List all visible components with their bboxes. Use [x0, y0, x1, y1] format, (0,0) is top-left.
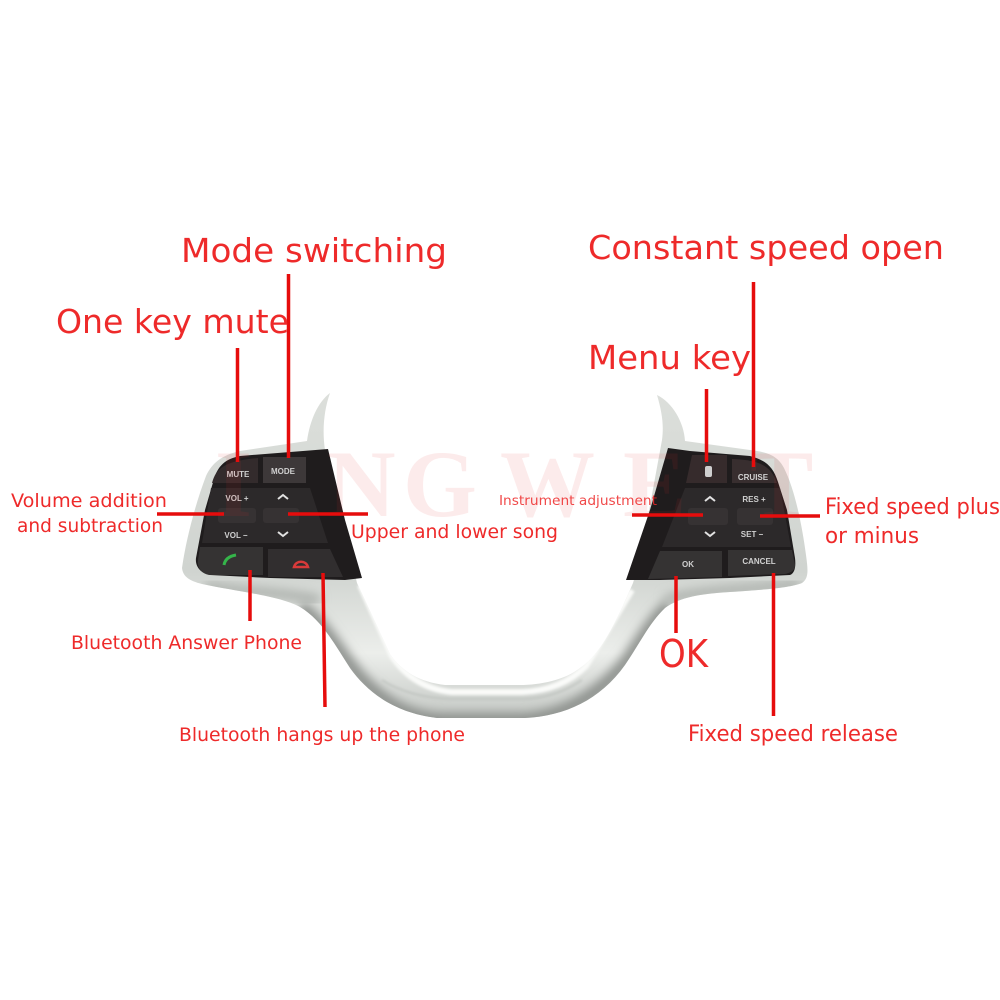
right button panel: RES +	[742, 495, 766, 504]
key: menu	[686, 455, 727, 483]
label: fixed speed release: Fixed speed release	[688, 722, 898, 747]
trim shading	[205, 584, 800, 720]
label: instrument adjustment: Instrument adjustment	[499, 493, 657, 509]
panel underside shadow	[205, 584, 800, 600]
key: mode	[263, 457, 306, 483]
icon: red phone	[294, 562, 308, 567]
key: hang up	[268, 549, 343, 577]
icon: chevron up	[278, 495, 288, 499]
label: fixed speed plus or minus	[825, 495, 1000, 549]
left button panel: MODE	[271, 467, 296, 476]
label: volume: and subtraction	[17, 515, 163, 537]
key: speed center	[737, 508, 773, 525]
lower arch crease	[382, 680, 582, 699]
key: instrument center	[688, 508, 728, 525]
line: mode	[287, 274, 290, 458]
key labels right: CRUISE	[738, 473, 769, 482]
label: OK: OK	[659, 632, 709, 676]
label: bluetooth hangs up: Bluetooth hangs up the phone	[179, 724, 465, 746]
line: menu	[705, 389, 708, 462]
key: track center	[263, 508, 299, 523]
key: volume rocker surround	[202, 488, 328, 543]
line: upper lower song	[288, 512, 368, 516]
key: volume center	[218, 508, 256, 523]
key labels left: MUTE	[227, 470, 250, 479]
line: mute	[236, 348, 239, 462]
leader lines	[157, 274, 820, 716]
lower arch shadow	[300, 605, 670, 720]
key: cancel	[728, 550, 795, 576]
lower arch highlight	[360, 585, 632, 692]
label: mode switching: Mode switching	[181, 231, 447, 270]
right button panel: SET −	[741, 530, 764, 539]
right panel body	[626, 448, 795, 580]
key: right rocker surround	[662, 488, 791, 547]
key: answer	[198, 547, 263, 575]
icon: chevron up right	[705, 497, 715, 501]
label: constant speed open: Constant speed open	[588, 228, 944, 267]
line: hang up	[323, 573, 325, 707]
label: volume	[11, 490, 167, 537]
right button panel: OK	[682, 560, 694, 569]
line: cruise	[752, 282, 755, 467]
key: OK	[648, 551, 722, 579]
right button panel	[626, 448, 795, 580]
icon: chevron down right	[705, 532, 715, 536]
left panel body	[196, 449, 362, 580]
icon: menu glyph	[705, 466, 712, 477]
label: upper and lower song: Upper and lower song	[351, 521, 558, 543]
line: volume	[157, 512, 224, 516]
left button panel: VOL +	[225, 494, 249, 503]
left button panel	[196, 449, 362, 580]
left button panel: VOL −	[224, 531, 248, 540]
label: bluetooth answer phone: Bluetooth Answer Phone	[71, 632, 302, 654]
line: instrument	[632, 513, 703, 517]
key: mute	[212, 458, 258, 483]
key: cruise	[732, 459, 777, 483]
silver bezel	[182, 393, 807, 718]
line: answer	[248, 570, 252, 621]
line: fixed speed	[760, 514, 820, 518]
icon: chevron down	[278, 532, 288, 536]
steering wheel trim	[182, 393, 807, 720]
label: fixed speed plus or minus: or minus	[825, 524, 919, 549]
right button panel: CANCEL	[742, 557, 776, 566]
label: menu key: Menu key	[588, 338, 751, 377]
icon: green phone	[224, 555, 236, 565]
label: one key mute: One key mute	[56, 302, 289, 341]
line: release	[772, 573, 775, 716]
label: volume: Volume addition	[11, 490, 167, 512]
watermark: INGWET	[215, 431, 813, 537]
line: OK	[674, 576, 678, 633]
